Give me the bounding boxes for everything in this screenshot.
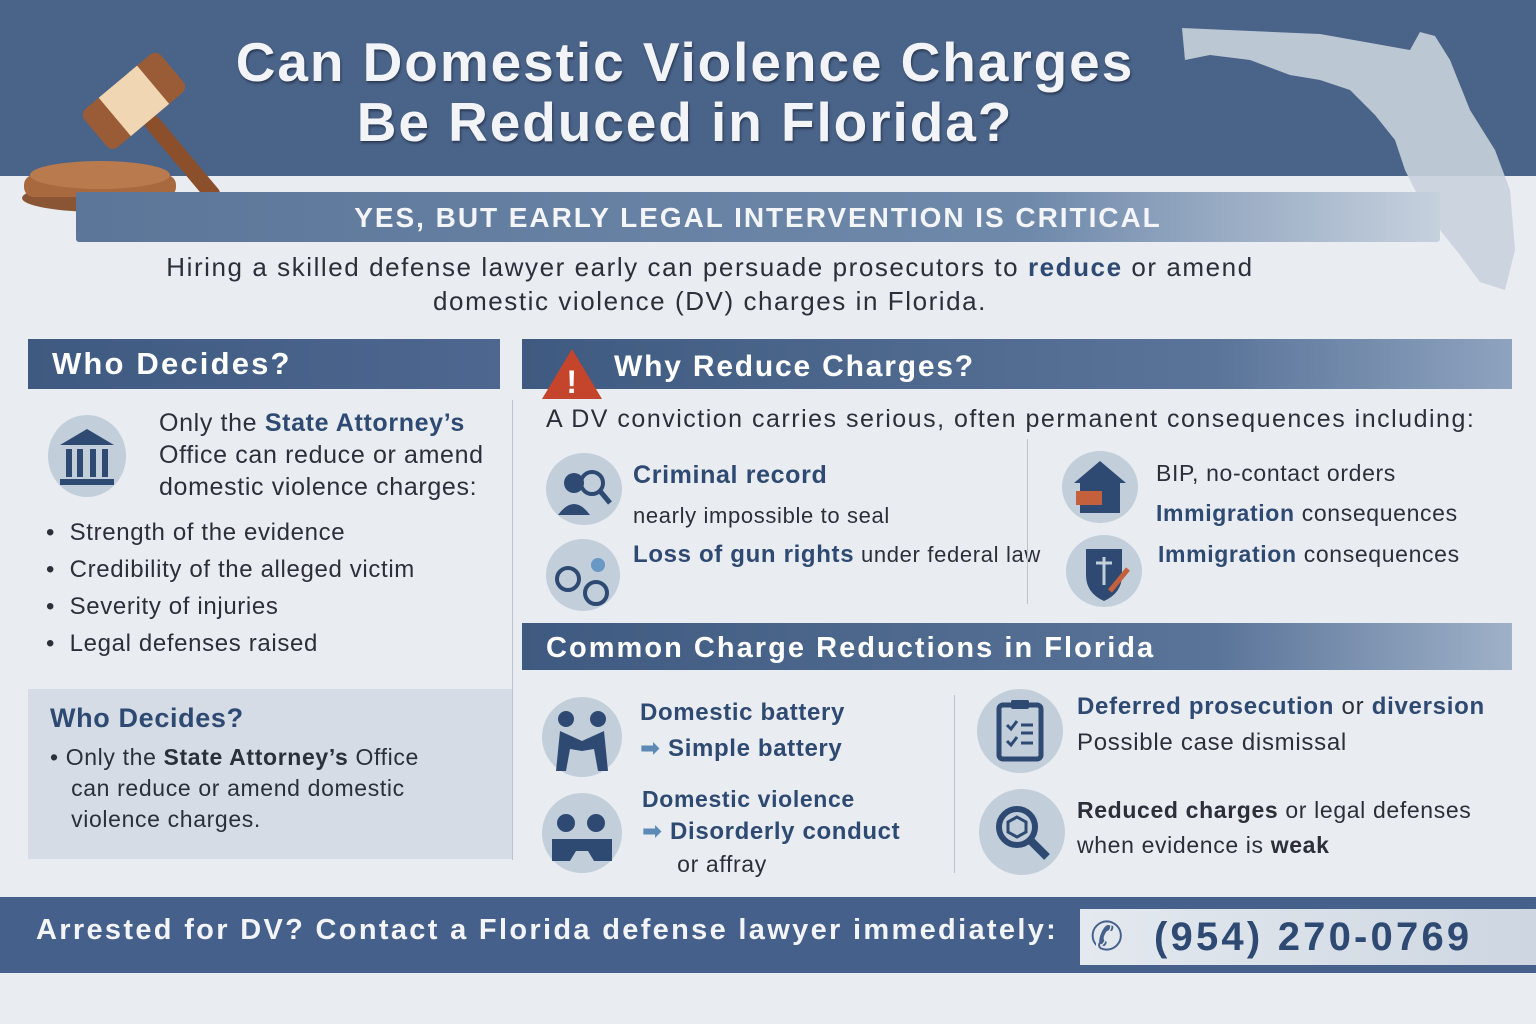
panel: common reductions: Domestic violence [642,786,855,812]
phone box [1080,909,1536,965]
panel: why reduce: Immigration consequences [1158,541,1460,567]
phone box: (954) 270-0769 [1154,915,1472,959]
sub box: • Only the State Attorney’s Office [50,744,419,770]
panel: why reduce: Criminal record [633,461,827,489]
bullet list: • Strength of the evidence [46,519,345,546]
item: deferred [977,689,1063,773]
banner: YES, BUT EARLY LEGAL INTERVENTION IS CRITICAL [354,202,1162,233]
heading [28,339,500,389]
panel: common reductions: Possible case dismissal [1077,729,1347,756]
item: BIP [1062,451,1138,523]
sub box: can reduce or amend domestic [71,775,405,801]
icon: warning: ! [566,364,578,400]
icon: gavel [22,52,220,212]
item: weak evidence [979,789,1065,875]
heading [522,623,1512,670]
heading [522,339,1512,389]
panel: why reduce: BIP, no-contact orders [1156,460,1396,486]
item: criminal record [546,453,622,525]
intro text [166,252,1254,316]
panel: why reduce [522,339,1512,611]
panel: common reductions: Reduced charges or legal defenses [1077,797,1471,823]
sub box: violence charges. [71,806,261,832]
item: battery [542,697,622,777]
item: gun rights [546,539,620,611]
text: Office can reduce or amend [159,441,484,469]
heading: Who Decides? [52,346,292,381]
heading: Why Reduce Charges? [614,350,975,383]
panel: why reduce: Loss of gun rights under federal law [633,541,1041,568]
icon: courthouse [48,415,126,497]
bullet list [46,519,415,657]
panel: why reduce: Immigration consequences [1156,500,1458,526]
bullet list: • Credibility of the alleged victim [46,556,415,583]
text: domestic violence charges: [159,473,477,501]
panel: why reduce: nearly impossible to seal [633,503,890,528]
panel: common reductions [522,623,1512,877]
title [236,31,1134,153]
panel: common reductions: or affray [677,851,767,877]
panel: common reductions: when evidence is weak [1077,832,1330,858]
banner [76,192,1440,242]
footer text: Arrested for DV? Contact a Florida defense lawyer immediately: [36,914,1058,946]
intro: A DV conviction carries serious, often permanent consequences including: [546,405,1475,433]
footer bar [0,897,1536,973]
panel: common reductions: Deferred prosecution or diversion [1077,693,1485,720]
icon: warning [542,349,602,400]
text [159,409,484,501]
text: Only the State Attorney’s [159,409,465,437]
panel: common reductions: ➡ Disorderly conduct [642,818,900,845]
title: Can Domestic Violence Charges [236,31,1134,93]
sub box [28,689,512,859]
item: dv [542,793,622,873]
title: Be Reduced in Florida? [357,91,1013,153]
top band [0,0,1536,176]
heading: Common Charge Reductions in Florida [546,632,1155,664]
sub box: Who Decides? [50,703,244,733]
bullet list: • Legal defenses raised [46,630,318,657]
panel: common reductions: Domestic battery [640,699,845,726]
item: immigration [1066,535,1142,607]
panel: who decides [28,339,512,859]
florida map [1182,28,1515,290]
icon: phone: ✆ [1090,915,1127,959]
intro text: Hiring a skilled defense lawyer early can persuade prosecutors to reduce or amend [166,252,1254,282]
bullet list: • Severity of injuries [46,593,279,620]
intro text: domestic violence (DV) charges in Florida. [433,286,987,316]
panel: common reductions: ➡ Simple battery [640,735,842,762]
